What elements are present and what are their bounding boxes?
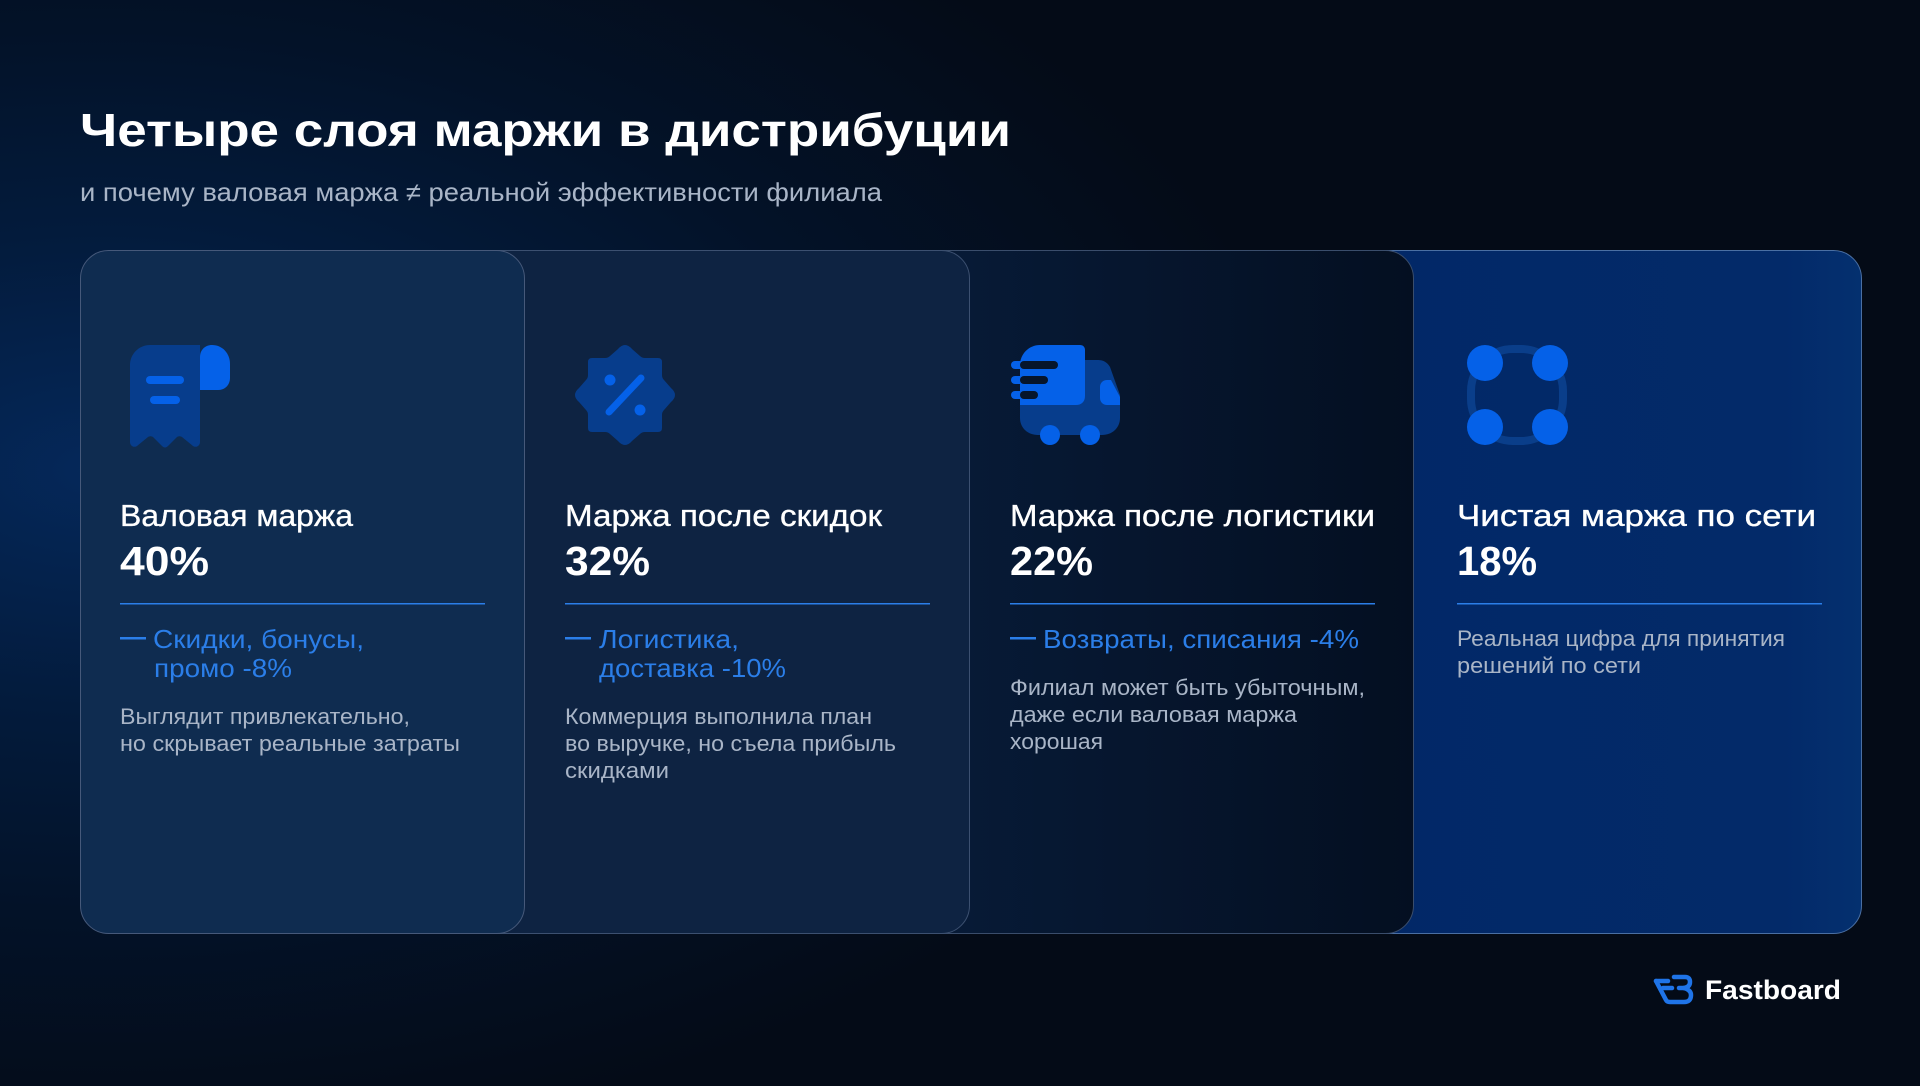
value: 18%: 18% <box>1457 538 1537 584</box>
title: Четыре слоя маржи в дистрибуции <box>80 104 1011 156</box>
deduction: logistics: доставка -10% <box>599 653 786 683</box>
description: after discounts: во выручке, но съела прибыль <box>565 731 896 756</box>
heading: after discounts: Маржа после скидок <box>565 498 882 533</box>
icon: delivery truck <box>1011 345 1120 445</box>
icon: network nodes <box>1467 345 1568 445</box>
description: after logistics: хорошая <box>1010 729 1103 754</box>
description: net margin: Реальная цифра для принятия <box>1457 626 1785 651</box>
value: 32%: 32% <box>565 538 650 584</box>
description: after logistics: Филиал может быть убыточным, <box>1010 675 1365 700</box>
heading: gross margin: Валовая маржа <box>120 498 354 533</box>
description: after logistics <box>1010 675 1365 754</box>
deduction: discounts: промо -8% <box>154 653 292 683</box>
heading: net margin: Чистая маржа по сети <box>1457 498 1816 533</box>
deduction: returns: Возвраты, списания -4% <box>1043 624 1359 654</box>
description: gross margin: но скрывает реальные затраты <box>120 731 460 756</box>
panel: margin after discounts <box>460 250 970 934</box>
value: 40%: 40% <box>120 538 209 584</box>
description: net margin: решений по сети <box>1457 653 1641 678</box>
description: net margin <box>1457 626 1785 678</box>
heading: after logistics: Маржа после логистики <box>1010 498 1375 533</box>
description: gross margin <box>120 704 460 756</box>
panel: margin after logistics <box>900 250 1414 934</box>
description: after logistics: даже если валовая маржа <box>1010 702 1298 727</box>
icon: Fastboard mark <box>1656 977 1691 1002</box>
icon: receipt <box>130 345 230 448</box>
description: gross margin: Выглядит привлекательно, <box>120 704 410 729</box>
description: after discounts: скидками <box>565 758 669 783</box>
description: after discounts <box>565 704 896 783</box>
icon: discount badge <box>575 345 675 445</box>
deduction: discounts <box>120 624 364 683</box>
wordmark: Fastboard <box>1705 975 1841 1005</box>
deduction: logistics: Логистика, <box>599 624 739 654</box>
value: 22%: 22% <box>1010 538 1093 584</box>
deduction: discounts: Скидки, бонусы, <box>153 624 364 654</box>
subtitle: и почему валовая маржа ≠ реальной эффективности филиала <box>80 177 883 207</box>
description: after discounts: Коммерция выполнила план <box>565 704 872 729</box>
deduction: logistics <box>565 624 786 683</box>
logo: Fastboard <box>1656 975 1841 1005</box>
panel: gross margin <box>80 250 524 934</box>
panel: net margin <box>1340 250 1862 934</box>
